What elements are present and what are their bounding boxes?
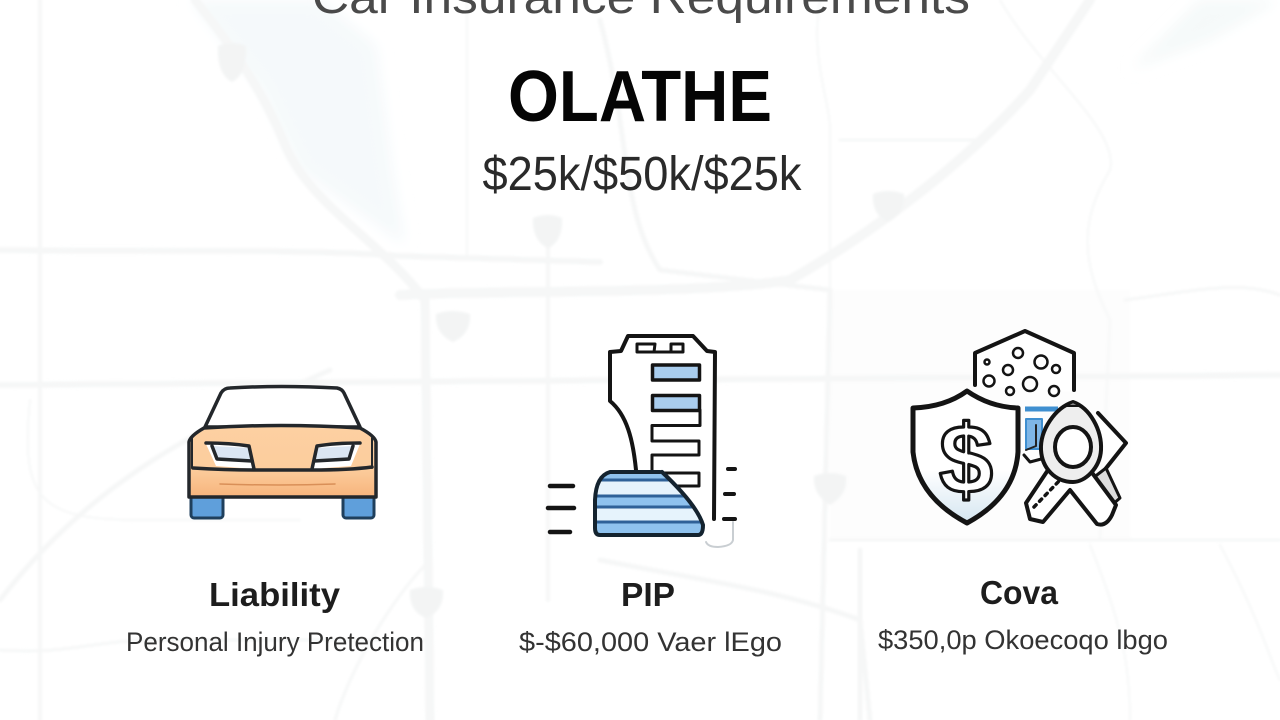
column: Liability bbox=[126, 576, 424, 657]
icon: PIP document and striped pad bbox=[548, 336, 735, 547]
dollar sign: $ bbox=[939, 405, 993, 514]
label: PIP: PIP bbox=[621, 576, 675, 613]
icon: car bbox=[189, 386, 376, 518]
description: Cova: $350,0p Okoecoqo lbgo bbox=[878, 625, 1168, 655]
coverage limits: $25k/$50k/$25k bbox=[482, 148, 802, 201]
column: Cova bbox=[878, 574, 1168, 655]
description: PIP: $-$60,000 Vaer lEgo bbox=[519, 627, 782, 657]
label: Liability: Liability bbox=[209, 576, 341, 613]
column: PIP bbox=[519, 576, 782, 657]
icon: shield, hexagon and ribbon bbox=[913, 331, 1126, 525]
heading: city: OLATHE bbox=[508, 57, 772, 137]
label: Cova: Cova bbox=[980, 574, 1059, 611]
description: Liability: Personal Injury Pretection bbox=[126, 627, 424, 657]
